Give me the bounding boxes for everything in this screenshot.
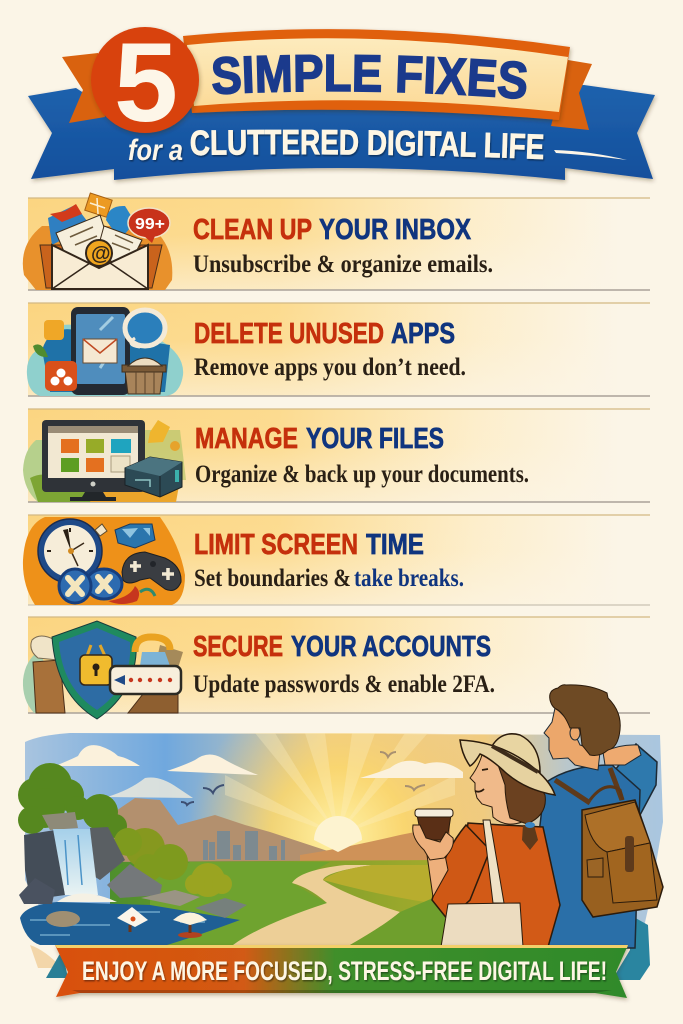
meadow (110, 860, 440, 945)
sync ring (125, 310, 165, 347)
leaf (33, 344, 48, 357)
trash basket (122, 358, 166, 394)
man with backpack (537, 685, 663, 948)
ear (570, 726, 580, 740)
heading (195, 423, 444, 455)
number 5: 5 (114, 20, 178, 145)
winding path (233, 865, 400, 945)
orange ribbon tails (62, 53, 592, 130)
controller (122, 552, 181, 590)
padlock (80, 645, 112, 685)
panel: manage files (23, 409, 650, 502)
heading: TIME (366, 529, 424, 561)
closing banner (55, 945, 628, 998)
blue ribbon (28, 85, 655, 180)
number badge (91, 20, 199, 145)
right meadow (323, 865, 445, 905)
orange app tile (45, 361, 77, 391)
heading (193, 631, 491, 663)
sun (314, 816, 362, 852)
description: Update passwords & enable 2FA. (193, 671, 495, 698)
scene: landscape (18, 733, 663, 980)
clouds (55, 745, 463, 798)
hair and braid (497, 762, 545, 824)
description: take breaks. (354, 565, 464, 592)
sun rays (180, 733, 500, 868)
description: Set boundaries & (194, 565, 351, 592)
icon: monitor and drive (23, 420, 186, 502)
head (544, 708, 600, 770)
blue goggles (59, 569, 122, 603)
panel: delete unused apps (27, 303, 650, 396)
open shackle (135, 637, 170, 652)
heading: APPS (391, 318, 455, 350)
shield (52, 621, 136, 719)
woman with hat and coffee (413, 734, 560, 947)
heading (193, 214, 472, 246)
mountains (110, 798, 450, 880)
yellow tile (44, 320, 64, 340)
heading: SECURE (193, 631, 283, 663)
neck and face (470, 755, 522, 824)
heading: DELETE UNUSED (194, 318, 384, 350)
description (194, 565, 464, 592)
coffee cup (413, 809, 453, 860)
description: Unsubscribe & organize emails. (193, 251, 493, 278)
heading: MANAGE (195, 423, 298, 455)
eye and smile (475, 769, 488, 792)
icon: shield and lock (23, 621, 183, 719)
heading: LIMIT SCREEN (194, 529, 358, 561)
icon: clock and controller (23, 517, 185, 605)
heading: YOUR INBOX (319, 214, 472, 246)
subtitle for a: for a (128, 134, 183, 167)
badge 99+ (128, 208, 170, 243)
envelope on phone (83, 339, 117, 363)
backpack (555, 768, 663, 917)
icon: phone and trash (27, 307, 183, 396)
icon: envelope with notifications: @ (91, 243, 111, 265)
hair (550, 685, 620, 755)
trees (18, 763, 188, 882)
cream title plate (187, 38, 568, 112)
heading: CLEAN UP (193, 214, 312, 246)
orange title ribbon (183, 29, 570, 120)
clock (38, 519, 102, 583)
panel: limit screen time (23, 515, 650, 605)
file drive (125, 457, 182, 497)
blue stone (115, 524, 155, 548)
swoosh (554, 150, 627, 160)
subtitle cluttered digital life: CLUTTERED DIGITAL LIFE (190, 130, 545, 162)
headline simple fixes: SIMPLE FIXES (212, 54, 527, 100)
chili (108, 586, 139, 604)
panel: clean up inbox (23, 193, 650, 290)
description: Remove apps you don’t need. (194, 354, 466, 381)
birds (181, 752, 425, 805)
tote bag and strap (441, 820, 523, 947)
description: Organize & back up your documents. (195, 461, 529, 488)
water pool (20, 902, 240, 945)
hand behind head (603, 745, 641, 765)
flowers (117, 907, 207, 938)
heading: YOUR FILES (306, 423, 444, 455)
city buildings (203, 831, 285, 860)
icon: envelope with notifications (23, 193, 172, 290)
badge 99+: 99+ (135, 216, 165, 233)
dress (445, 823, 560, 947)
sky (25, 733, 663, 945)
heading: YOUR ACCOUNTS (291, 631, 491, 663)
rocks and waterfall (19, 812, 247, 927)
raised arm (615, 744, 657, 815)
arm (432, 825, 490, 920)
lower blobs (30, 915, 650, 980)
torso (537, 765, 640, 948)
password field (110, 666, 181, 694)
title banner (28, 20, 658, 184)
hat (460, 734, 555, 795)
panel: secure accounts (23, 617, 650, 719)
